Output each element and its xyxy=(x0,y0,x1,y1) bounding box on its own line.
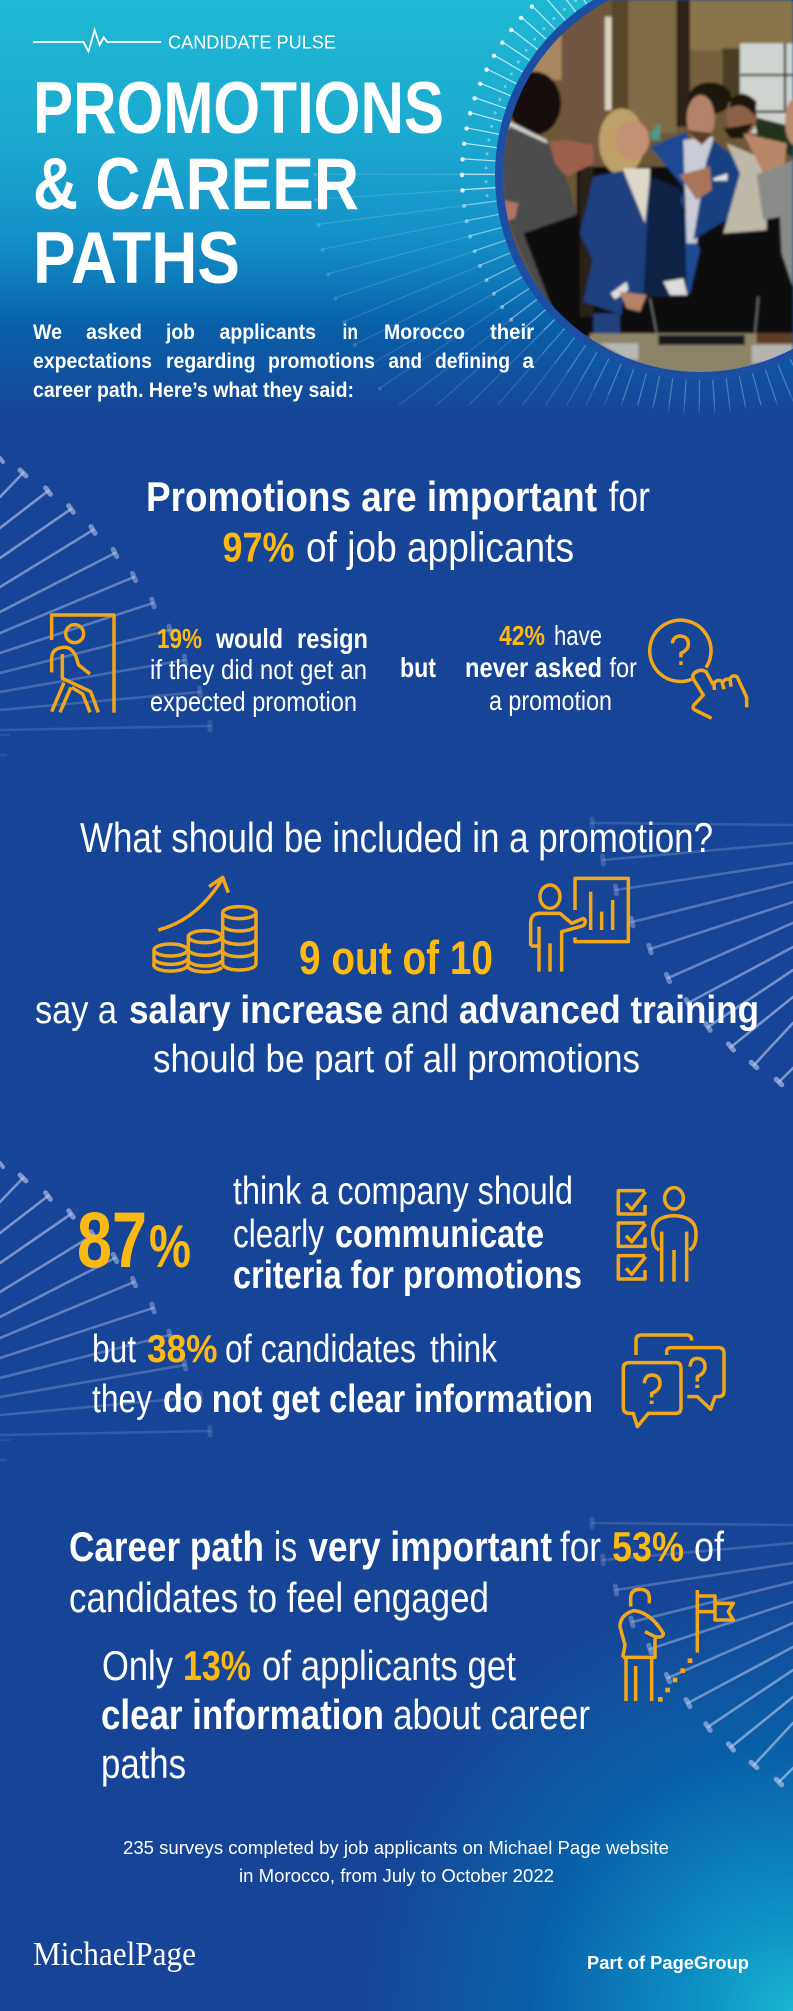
text: 38% no clear information: do not get clear information xyxy=(163,1378,593,1421)
text: career path engagement: very important xyxy=(308,1523,552,1570)
intro paragraph: their xyxy=(490,320,535,344)
intro paragraph: a xyxy=(522,349,535,373)
intro paragraph: expectations xyxy=(33,349,152,373)
text: salary increase and advanced training: advanced training xyxy=(459,989,759,1032)
stat: 42% have never asked xyxy=(465,620,637,716)
text: 38% no clear information: of candidates xyxy=(225,1328,416,1371)
stat: 87%: 87 xyxy=(77,1195,147,1284)
text: career path engagement: for xyxy=(560,1523,601,1570)
person: left colleague xyxy=(502,72,593,333)
intro paragraph: We xyxy=(33,320,62,344)
title: & CAREER xyxy=(33,144,359,225)
stat: 42% have never asked: have xyxy=(554,620,602,651)
text: communicate criteria xyxy=(233,1170,582,1297)
text: salary increase and advanced training: should be part of all promotions xyxy=(153,1038,640,1081)
intro paragraph xyxy=(33,320,535,402)
text: career path engagement: Career path xyxy=(69,1523,264,1570)
text: communicate criteria: clearly xyxy=(233,1213,325,1256)
stat: 19% would resign: would xyxy=(215,623,283,654)
text: only 13% get clear information: about career xyxy=(393,1691,590,1738)
intro paragraph: promotions xyxy=(268,349,375,373)
logo: Michael Page: MichaelPage xyxy=(33,1936,196,1973)
photo: team applauding, in circular frame xyxy=(480,0,793,400)
stat: 19% would resign: if they did not get an xyxy=(150,654,367,685)
text: 38% no clear information: 38% xyxy=(147,1328,218,1371)
text: 38% no clear information: they xyxy=(92,1378,153,1421)
intro paragraph: job xyxy=(165,320,195,344)
title: PATHS xyxy=(33,218,240,299)
stat: 87%: % xyxy=(149,1213,191,1280)
icon: speech bubbles with question marks xyxy=(623,1335,724,1427)
stat: 42% have never asked: for xyxy=(610,652,637,683)
intro paragraph: and xyxy=(388,349,422,373)
stat: 9 out of 10: 9 out of 10 xyxy=(299,931,493,984)
heading: promotions are important: for xyxy=(608,473,650,520)
heading: promotions are important xyxy=(146,473,650,570)
icon: checklist and person xyxy=(618,1188,696,1282)
title xyxy=(33,68,444,299)
header pulse line and label: CANDIDATE PULSE xyxy=(168,32,336,53)
text: communicate criteria: think a company should xyxy=(233,1170,573,1213)
heading: promotions are important: Promotions are important xyxy=(146,473,597,520)
text: salary increase and advanced training: say a xyxy=(35,989,118,1032)
stat: 42% have never asked: a promotion xyxy=(489,685,612,716)
intro paragraph: career path. Here’s what they said: xyxy=(33,378,354,402)
intro paragraph: asked xyxy=(86,320,142,344)
stat: 19% would resign: resign xyxy=(297,623,368,654)
heading: promotions are important: of job applicants xyxy=(306,524,574,570)
text: communicate criteria: criteria for promotions xyxy=(233,1254,582,1297)
text: only 13% get clear information xyxy=(101,1642,590,1787)
text: salary increase and advanced training xyxy=(35,989,759,1081)
stat: 42% have never asked: 42% xyxy=(499,620,545,651)
text: salary increase and advanced training: and xyxy=(391,989,449,1032)
intro paragraph: in xyxy=(342,320,358,344)
text: career path engagement: 53% xyxy=(612,1523,684,1570)
connector: but: but xyxy=(400,652,436,683)
text: only 13% get clear information: 13% xyxy=(183,1642,251,1689)
heading: promotions are important: 97% xyxy=(222,524,294,570)
text: communicate criteria: communicate xyxy=(335,1213,544,1256)
stat: 42% have never asked: never asked xyxy=(465,652,602,683)
intro paragraph: applicants xyxy=(220,320,316,344)
person: central man, blue blazer xyxy=(650,82,747,293)
text: career path engagement: candidates to feel engaged xyxy=(69,1574,489,1621)
text: career path engagement xyxy=(69,1523,724,1621)
intro paragraph: regarding xyxy=(166,349,256,373)
text: 38% no clear information: think xyxy=(430,1328,498,1371)
text: salary increase and advanced training: salary increase xyxy=(129,989,383,1032)
logo: Part of PageGroup: Part of PageGroup xyxy=(587,1953,749,1973)
text: only 13% get clear information: paths xyxy=(101,1740,186,1787)
icon: person looking at flag xyxy=(620,1589,733,1702)
text: only 13% get clear information: clear information xyxy=(101,1691,384,1738)
stat: 19% would resign xyxy=(150,623,368,717)
title: PROMOTIONS xyxy=(33,68,444,149)
header pulse line and label xyxy=(33,30,336,53)
stat: 19% would resign: expected promotion xyxy=(150,686,357,717)
footnote: survey source: in Morocco, from July to October 2022 xyxy=(239,1865,554,1886)
text: career path engagement: is xyxy=(274,1523,297,1570)
person: right colleague, grey suit xyxy=(757,98,793,287)
intro paragraph: Morocco xyxy=(384,320,465,344)
footnote: survey source xyxy=(123,1837,669,1886)
chair and table xyxy=(587,294,793,372)
text: only 13% get clear information: of applicants get xyxy=(262,1642,516,1689)
icon: coin stacks with rising arrow xyxy=(154,877,256,972)
icon: presenter with bar chart board xyxy=(531,878,628,972)
person: bearded man xyxy=(721,92,789,297)
intro paragraph: defining xyxy=(435,349,510,373)
text: 38% no clear information xyxy=(92,1328,593,1421)
icon: question mark and pointing hand xyxy=(650,620,747,718)
text: 38% no clear information: but xyxy=(92,1328,136,1371)
person: woman in blue blazer xyxy=(580,108,687,335)
stat: 19% would resign: 19% xyxy=(157,623,202,654)
footnote: survey source: 235 surveys completed by job applicants on Michael Page website xyxy=(123,1837,669,1858)
icon: person walking out of door xyxy=(52,615,114,713)
text: only 13% get clear information: Only xyxy=(102,1642,173,1689)
text: career path engagement: of xyxy=(694,1523,724,1570)
